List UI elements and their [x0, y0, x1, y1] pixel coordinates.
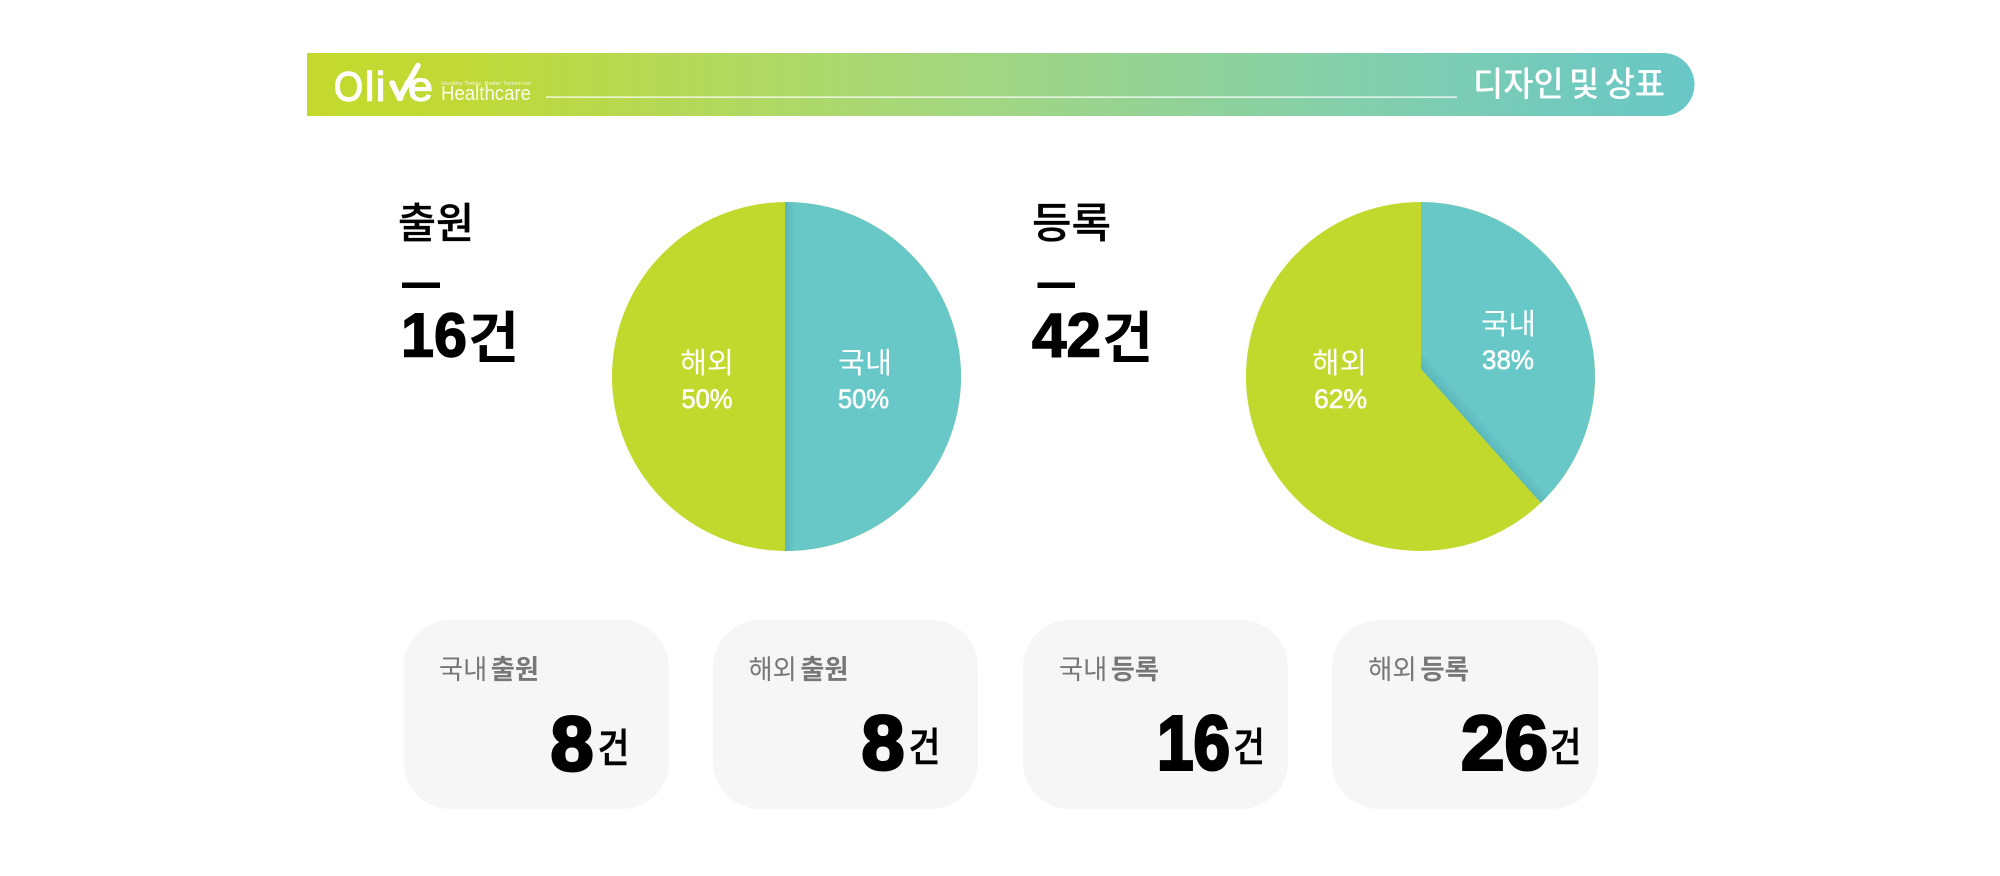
- card: 해외 출원 8건: 해외 출원: [748, 655, 848, 685]
- logo: Olive Healthcare: e: [408, 64, 433, 110]
- label: 국내 50%: 국내: [838, 348, 892, 380]
- heading: 출원: 출원: [398, 200, 474, 247]
- total: 16건: [401, 302, 519, 370]
- card: 해외 등록 26건: 해외 등록: [1368, 655, 1469, 685]
- header banner: [307, 53, 1695, 116]
- card: 국내 등록 16건: 국내 등록: [1059, 655, 1159, 685]
- total: 42건: [1032, 302, 1153, 370]
- card: 해외 등록 26건: [1332, 620, 1598, 809]
- label: 해외 62%: [1312, 348, 1367, 414]
- card: 해외 등록 26건: 건: [1550, 726, 1582, 770]
- logo: Olive Healthcare: Healthy Today, Better Tomorrow: [441, 81, 531, 87]
- label: 국내 38%: 국내: [1481, 309, 1536, 341]
- total: 42건: 건: [1102, 307, 1153, 370]
- panel: 출원 summary: [398, 200, 519, 370]
- label: 해외 50%: 50%: [682, 384, 732, 414]
- card: 해외 등록 26건: 26: [1461, 700, 1548, 786]
- card: 국내 출원 8건: [404, 620, 669, 809]
- card: 국내 등록 16건: 16: [1157, 700, 1230, 786]
- label: 해외 50%: 해외: [680, 348, 734, 380]
- logo: Olive Healthcare: Healthcare: [441, 83, 531, 105]
- card: 국내 출원 8건: 건: [598, 727, 630, 771]
- pie chart: 등록: [1246, 202, 1595, 551]
- card: 국내 등록 16건: [1023, 620, 1288, 809]
- card: 국내 출원 8건: 8: [550, 702, 594, 788]
- card: 해외 출원 8건: [713, 620, 978, 809]
- panel: 등록 summary: [1032, 200, 1153, 370]
- logo: Olive Healthcare: liv: [365, 64, 409, 110]
- total: 42건: 42: [1032, 302, 1101, 370]
- label: 국내 50%: [838, 348, 892, 414]
- pie chart: 출원: [612, 202, 961, 551]
- header rule: [546, 96, 1457, 98]
- label: 국내 38%: 38%: [1482, 345, 1534, 375]
- card: 해외 출원 8건: 8: [862, 700, 904, 786]
- dash: [1038, 282, 1075, 288]
- logo: Olive Healthcare: [334, 64, 531, 110]
- label: 국내 38%: [1481, 309, 1536, 375]
- total: 16건: 16: [401, 302, 467, 370]
- header title: 디자인 및 상표: [1473, 66, 1665, 104]
- card: 해외 출원 8건: 건: [908, 726, 940, 770]
- label: 해외 50%: [680, 348, 734, 414]
- label: 해외 62%: 해외: [1312, 348, 1367, 380]
- card: 국내 등록 16건: 건: [1233, 726, 1265, 770]
- card: 국내 출원 8건: 국내 출원: [439, 655, 539, 685]
- label: 해외 62%: 62%: [1314, 384, 1367, 414]
- label: 국내 50%: 50%: [838, 384, 889, 414]
- total: 16건: 건: [468, 307, 519, 370]
- dash: [402, 282, 440, 288]
- heading: 등록: 등록: [1032, 200, 1111, 247]
- logo: Olive Healthcare: O: [334, 64, 363, 110]
